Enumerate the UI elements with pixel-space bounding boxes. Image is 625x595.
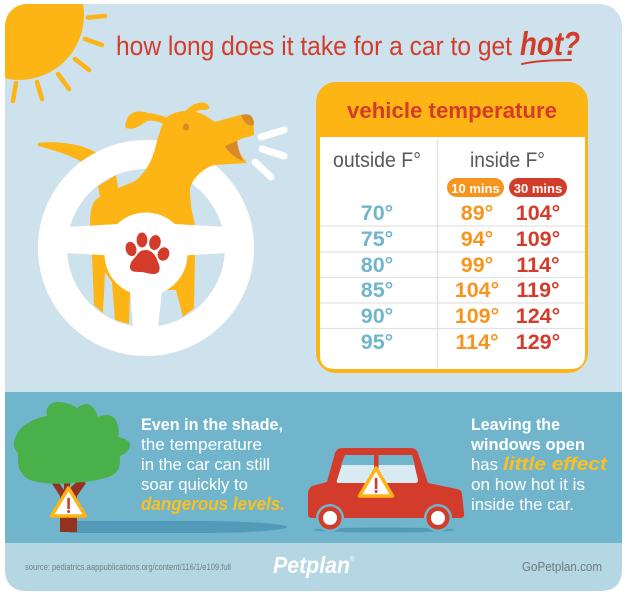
table body bbox=[320, 137, 585, 369]
illustration: car bbox=[308, 448, 464, 532]
column: inside after 10 mins: 94° bbox=[461, 227, 493, 251]
title: hot? bbox=[520, 25, 580, 62]
illustration: tree bbox=[14, 402, 287, 533]
panel: footer band bbox=[5, 543, 622, 591]
column: inside after 10 mins: 109° bbox=[455, 304, 499, 328]
text: shade fact: soar quickly to bbox=[141, 475, 248, 494]
column: inside after 10 mins: 89° bbox=[461, 201, 493, 225]
text: windows fact: has bbox=[471, 455, 498, 474]
column: inside after 30 mins: 124° bbox=[516, 304, 560, 328]
source note: source: pediatrics.aappublications.org/content/116/1/e109.full bbox=[25, 562, 231, 573]
car window pillar bbox=[374, 455, 378, 469]
dog mouth bbox=[225, 141, 243, 161]
steering wheel ring bbox=[52, 154, 240, 342]
table frame bbox=[316, 82, 588, 373]
text: shade fact bbox=[141, 415, 285, 514]
front wheel bbox=[424, 504, 452, 532]
car window upper tint bbox=[341, 455, 415, 465]
pill: 10 mins bbox=[447, 178, 504, 197]
warning sign on car bbox=[360, 468, 392, 496]
dog nose bbox=[241, 114, 254, 126]
dog tail bbox=[38, 142, 97, 162]
barking lines bbox=[255, 130, 284, 177]
tree trunk bbox=[60, 505, 77, 532]
panel: vehicle temperature table bbox=[316, 82, 588, 373]
steering wheel front bbox=[52, 154, 240, 342]
column: outside temperatures: 75° bbox=[361, 227, 393, 251]
column: inside after 30 mins: 114° bbox=[516, 253, 560, 277]
pill: 30 mins bbox=[509, 178, 567, 197]
dog bbox=[90, 102, 254, 324]
text: windows fact: on how hot it is bbox=[471, 475, 585, 494]
text: windows fact: Leaving the bbox=[471, 415, 560, 434]
table grid bbox=[320, 140, 585, 368]
car shadow bbox=[313, 528, 455, 532]
text: windows fact bbox=[470, 415, 608, 514]
column headers: inside F° bbox=[470, 149, 545, 172]
dog right ear bbox=[185, 102, 209, 113]
tree branches bbox=[51, 479, 86, 510]
car window glass bbox=[337, 455, 418, 483]
car body bbox=[308, 448, 464, 518]
column: inside after 30 mins bbox=[516, 201, 560, 354]
column: outside temperatures: 80° bbox=[361, 253, 393, 277]
text: shade fact: the temperature bbox=[141, 435, 262, 454]
column: outside temperatures: 90° bbox=[361, 304, 393, 328]
column: outside temperatures bbox=[361, 201, 393, 354]
column headers: outside F° bbox=[333, 149, 421, 172]
pill: 10 mins: 10 mins bbox=[451, 181, 500, 196]
column headers bbox=[333, 149, 545, 172]
text: shade fact: dangerous levels. bbox=[141, 494, 285, 514]
column: outside temperatures: 85° bbox=[361, 278, 393, 302]
text: shade fact: in the car can still bbox=[141, 455, 270, 474]
pill: 30 mins: 30 mins bbox=[514, 181, 562, 196]
table heading: vehicle temperature bbox=[347, 98, 557, 123]
panel: facts band bbox=[5, 392, 622, 543]
text: windows fact: little effect bbox=[503, 454, 608, 474]
icon: sun bbox=[0, 0, 105, 101]
title: how long does it take for a car to get bbox=[116, 31, 512, 61]
text: windows fact: inside the car. bbox=[471, 495, 574, 514]
rear wheel bbox=[316, 504, 344, 532]
tree shadow bbox=[70, 521, 287, 533]
column: inside after 30 mins: 109° bbox=[516, 227, 560, 251]
column: inside after 30 mins: 104° bbox=[516, 201, 560, 225]
warning sign bbox=[52, 488, 86, 516]
column: inside after 10 mins bbox=[455, 201, 499, 354]
logo: Petplan: Petplan bbox=[273, 552, 350, 578]
column: inside after 10 mins: 99° bbox=[461, 253, 493, 277]
text: windows fact: windows open bbox=[470, 435, 585, 454]
column: outside temperatures: 95° bbox=[361, 330, 393, 354]
illustration: dog and steering wheel bbox=[38, 102, 284, 342]
dog left ear bbox=[125, 111, 168, 129]
column: inside after 30 mins: 119° bbox=[516, 278, 560, 302]
logo: Petplan: ® bbox=[350, 556, 355, 563]
website link: GoPetplan.com bbox=[522, 560, 602, 574]
column: inside after 30 mins: 129° bbox=[516, 330, 560, 354]
dog eye bbox=[183, 124, 189, 130]
column: inside after 10 mins: 104° bbox=[455, 278, 499, 302]
text: shade fact: Even in the shade, bbox=[141, 415, 283, 434]
column: outside temperatures: 70° bbox=[361, 201, 393, 225]
icon: paw print bbox=[124, 232, 171, 274]
tree crown bbox=[14, 402, 130, 484]
column: inside after 10 mins: 114° bbox=[455, 330, 499, 354]
